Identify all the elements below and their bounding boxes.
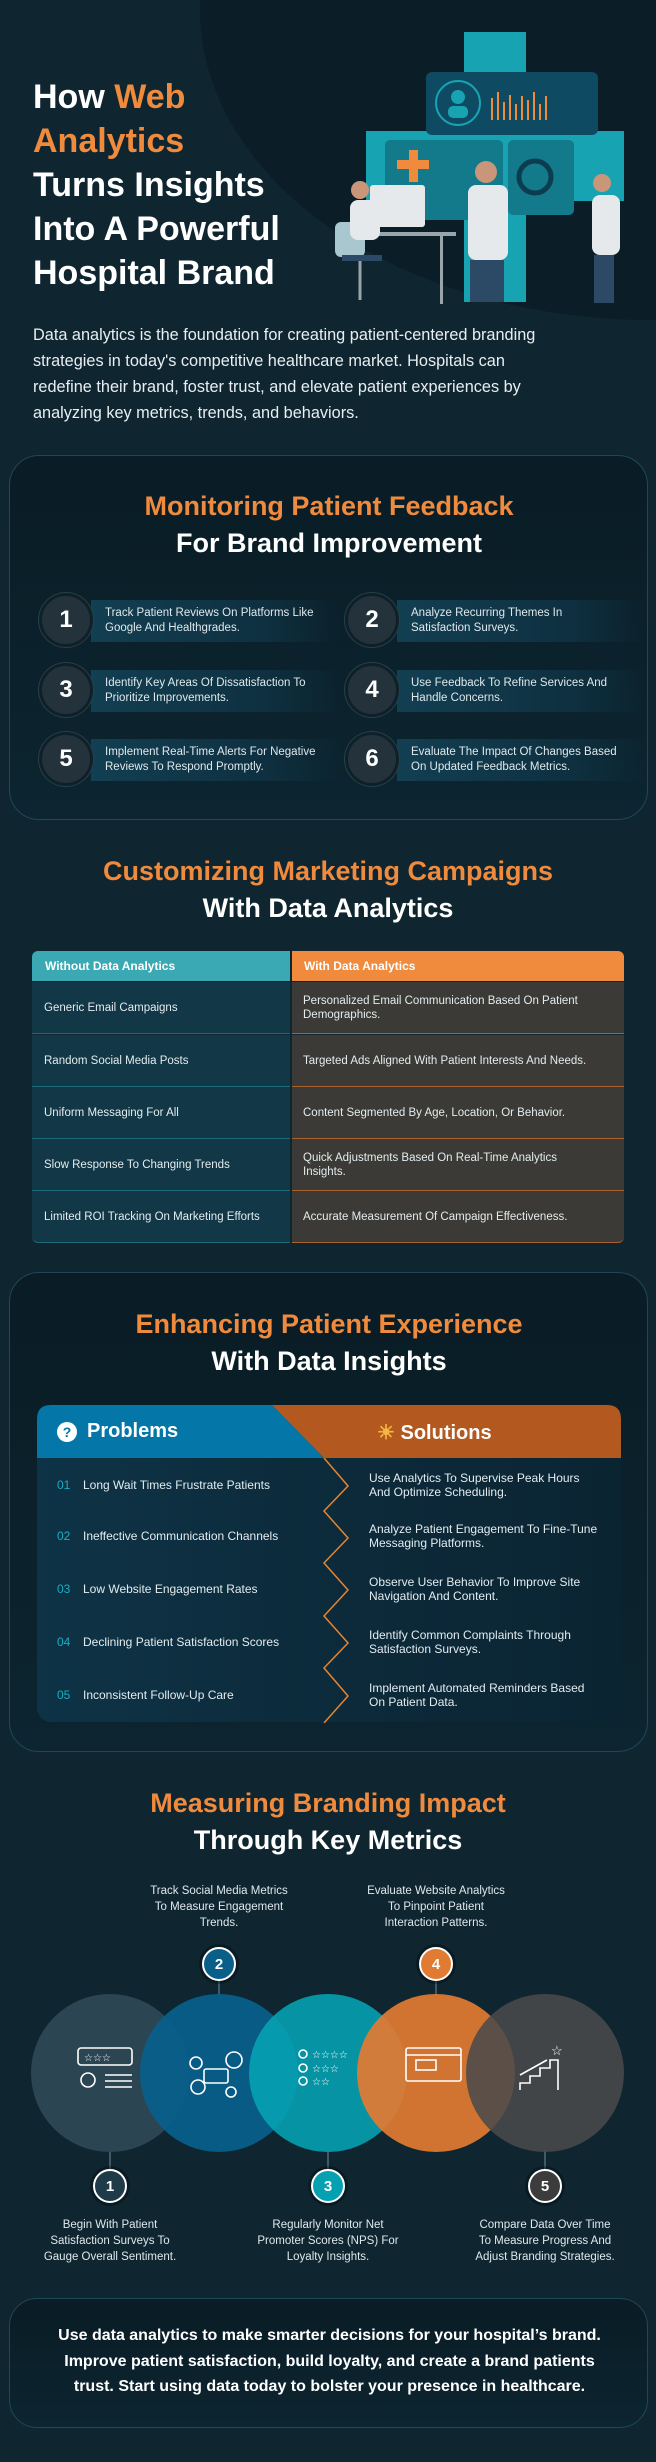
item 6: 6 xyxy=(365,745,379,772)
item 5: Implement Real-Time Alerts For Negative xyxy=(105,746,315,758)
metric 2: Track Social Media Metrics xyxy=(150,1885,288,1897)
comparison table: Slow Response To Changing Trends xyxy=(44,1158,230,1170)
comparison table: Generic Email Campaigns xyxy=(44,1002,178,1014)
problems/solutions table: Low Website Engagement Rates xyxy=(83,1582,258,1596)
metric 2: To Measure Engagement xyxy=(155,1901,283,1913)
item 1: Google And Healthgrades. xyxy=(105,622,240,634)
item 1: Track Patient Reviews On Platforms Like xyxy=(105,607,314,619)
problems/solutions table: Long Wait Times Frustrate Patients xyxy=(83,1478,270,1492)
intro paragraph: analyzing key metrics, trends, and behaviors. xyxy=(33,404,359,422)
metric 2: 2 xyxy=(215,1956,223,1972)
metric 2 xyxy=(150,1885,288,1984)
comparison table xyxy=(32,951,624,1243)
header bar xyxy=(37,1405,621,1458)
metric 1: 1 xyxy=(106,2178,114,2194)
title: Analytics xyxy=(33,122,184,160)
comparison table: Personalized Email Communication Based On Patient xyxy=(303,994,578,1006)
metric 5: 5 xyxy=(541,2178,549,2194)
heading: customizing marketing xyxy=(103,856,553,923)
problems/solutions table: Inconsistent Follow-Up Care xyxy=(83,1688,234,1702)
metric 1: Begin With Patient xyxy=(63,2219,157,2231)
problems/solutions table: 02 xyxy=(57,1529,70,1543)
metric 3 xyxy=(257,2166,399,2263)
metric 1: Satisfaction Surveys To xyxy=(50,2235,170,2247)
heading: customizing marketing: Customizing Marketing Campaigns xyxy=(103,856,553,886)
metrics diagram xyxy=(31,1885,624,2263)
metric 4: Evaluate Website Analytics xyxy=(367,1885,505,1897)
comparison table: Demographics. xyxy=(303,1008,380,1020)
header: problems: ? xyxy=(63,1424,71,1440)
heading: measuring branding impact: Through Key Metrics xyxy=(194,1825,462,1855)
heading: enhancing xyxy=(135,1309,523,1376)
comparison table: Insights. xyxy=(303,1166,346,1178)
zigzag xyxy=(323,1458,349,1723)
item 1 xyxy=(38,592,314,648)
heading: enhancing: Enhancing Patient Experience xyxy=(135,1309,523,1339)
header: solutions: ☀ Solutions xyxy=(377,1422,492,1444)
item 3 xyxy=(38,662,310,718)
problems/solutions table: Ineffective Communication Channels xyxy=(83,1529,278,1543)
title: How Web xyxy=(33,78,185,116)
problems/solutions table: On Patient Data. xyxy=(369,1695,458,1709)
title: Hospital Brand xyxy=(33,254,275,292)
metric 4: To Pinpoint Patient xyxy=(388,1901,484,1913)
circles xyxy=(31,1994,624,2152)
item 4: 4 xyxy=(365,676,379,703)
heading: measuring branding impact: Measuring Branding Impact xyxy=(150,1788,506,1818)
metric 4: Interaction Patterns. xyxy=(385,1917,487,1929)
item 4: Use Feedback To Refine Services And xyxy=(411,677,607,689)
comparison table: Limited ROI Tracking On Marketing Efforts xyxy=(44,1210,260,1222)
problems/solutions table: 03 xyxy=(57,1582,70,1596)
item 2 xyxy=(344,592,619,648)
title xyxy=(33,78,280,292)
heading: measuring branding impact xyxy=(150,1788,506,1855)
problems/solutions table: 05 xyxy=(57,1688,70,1702)
closing call to action: Use data analytics to make smarter decisions for your hospital’s brand. xyxy=(58,2327,601,2344)
circles: ☆ xyxy=(551,2043,563,2058)
problems/solutions table: Analyze Patient Engagement To Fine-Tune xyxy=(369,1522,597,1536)
problems/solutions table: Use Analytics To Supervise Peak Hours xyxy=(369,1471,580,1485)
item 6 xyxy=(344,731,617,787)
comparison table: Random Social Media Posts xyxy=(44,1054,188,1066)
closing call to action xyxy=(9,2298,648,2428)
background arc xyxy=(200,0,656,320)
intro paragraph: redefine their brand, foster trust, and elevate patient experiences by xyxy=(33,378,521,396)
item 5: Reviews To Respond Promptly. xyxy=(105,761,264,773)
header without xyxy=(32,951,290,981)
item 3: 3 xyxy=(59,676,73,703)
item 6: On Updated Feedback Metrics. xyxy=(411,761,570,773)
item 4 xyxy=(344,662,616,718)
header with: With Data Analytics xyxy=(304,959,415,973)
problems/solutions table xyxy=(37,1405,621,1723)
circles: ☆☆☆ xyxy=(312,2064,339,2075)
comparison table: Content Segmented By Age, Location, Or Behavior. xyxy=(303,1106,565,1118)
item 1: 1 xyxy=(59,606,73,633)
metric 2: Trends. xyxy=(200,1917,238,1929)
metric 3: Promoter Scores (NPS) For xyxy=(257,2235,399,2247)
metric 3: Loyalty Insights. xyxy=(287,2251,369,2263)
metric 5 xyxy=(475,2166,615,2263)
comparison table: Targeted Ads Aligned With Patient Interests And Needs. xyxy=(303,1054,586,1066)
item 2: Satisfaction Surveys. xyxy=(411,622,518,634)
connector lines xyxy=(109,1981,546,2169)
problems/solutions table: Satisfaction Surveys. xyxy=(369,1642,481,1656)
problems/solutions table: Implement Automated Reminders Based xyxy=(369,1681,584,1695)
comparison table: Quick Adjustments Based On Real-Time Analytics xyxy=(303,1152,557,1164)
problems/solutions table: And Optimize Scheduling. xyxy=(369,1485,507,1499)
item 2: Analyze Recurring Themes In xyxy=(411,607,562,619)
metric 5: Adjust Branding Strategies. xyxy=(475,2251,615,2263)
heading: monitoring xyxy=(144,491,514,558)
intro paragraph: strategies in today's competitive healthcare market. Hospitals can xyxy=(33,352,505,370)
comparison table: Accurate Measurement Of Campaign Effectiveness. xyxy=(303,1210,567,1222)
header: problems: Problems xyxy=(87,1420,178,1442)
heading: monitoring: Monitoring Patient Feedback xyxy=(144,491,514,521)
metric 1 xyxy=(44,2166,176,2263)
comparison table: Uniform Messaging For All xyxy=(44,1106,179,1118)
metric 3: Regularly Monitor Net xyxy=(272,2219,384,2231)
circles: ☆☆☆☆ xyxy=(312,2050,348,2061)
closing call to action: Improve patient satisfaction, build loyalty, and create a brand patients xyxy=(64,2352,595,2370)
intro paragraph: Data analytics is the foundation for creating patient-centered branding xyxy=(33,326,535,344)
metric 4 xyxy=(367,1885,505,1984)
item 3: Identify Key Areas Of Dissatisfaction To xyxy=(105,677,306,689)
metric 1: Gauge Overall Sentiment. xyxy=(44,2251,176,2263)
panel: enhancing patient experience xyxy=(9,1272,648,1752)
problems/solutions table: Navigation And Content. xyxy=(369,1589,498,1603)
heading: monitoring: For Brand Improvement xyxy=(176,528,482,558)
metric 5: Compare Data Over Time xyxy=(479,2219,610,2231)
problems/solutions table: Identify Common Complaints Through xyxy=(369,1628,571,1642)
problems/solutions table: Observe User Behavior To Improve Site xyxy=(369,1575,580,1589)
item 6: Evaluate The Impact Of Changes Based xyxy=(411,746,617,758)
intro paragraph xyxy=(33,326,535,422)
metric 3: 3 xyxy=(324,2178,332,2194)
illustration: doctors with analytics dashboard xyxy=(335,32,624,304)
problems/solutions table: 01 xyxy=(57,1478,70,1492)
title: Turns Insights xyxy=(33,166,265,204)
item 2: 2 xyxy=(365,606,379,633)
circles: ☆☆ xyxy=(312,2077,330,2088)
heading: enhancing: With Data Insights xyxy=(211,1346,447,1376)
problems/solutions table: Messaging Platforms. xyxy=(369,1536,484,1550)
header without: Without Data Analytics xyxy=(45,959,175,973)
title: Into A Powerful xyxy=(33,210,280,248)
circles: ☆☆☆ xyxy=(84,2053,111,2064)
problems/solutions table: 04 xyxy=(57,1635,70,1649)
item 4: Handle Concerns. xyxy=(411,692,503,704)
header with xyxy=(292,951,624,981)
item 5 xyxy=(38,731,315,787)
metric 5: To Measure Progress And xyxy=(479,2235,611,2247)
heading: customizing marketing: With Data Analytics xyxy=(203,893,453,923)
item 3: Prioritize Improvements. xyxy=(105,692,229,704)
metric 4: 4 xyxy=(432,1956,440,1972)
item 5: 5 xyxy=(59,745,73,772)
closing call to action: trust. Start using data today to bolster your presence in healthcare. xyxy=(74,2378,585,2395)
problems/solutions table: Declining Patient Satisfaction Scores xyxy=(83,1635,279,1649)
panel: monitoring patient feedback xyxy=(9,455,648,820)
